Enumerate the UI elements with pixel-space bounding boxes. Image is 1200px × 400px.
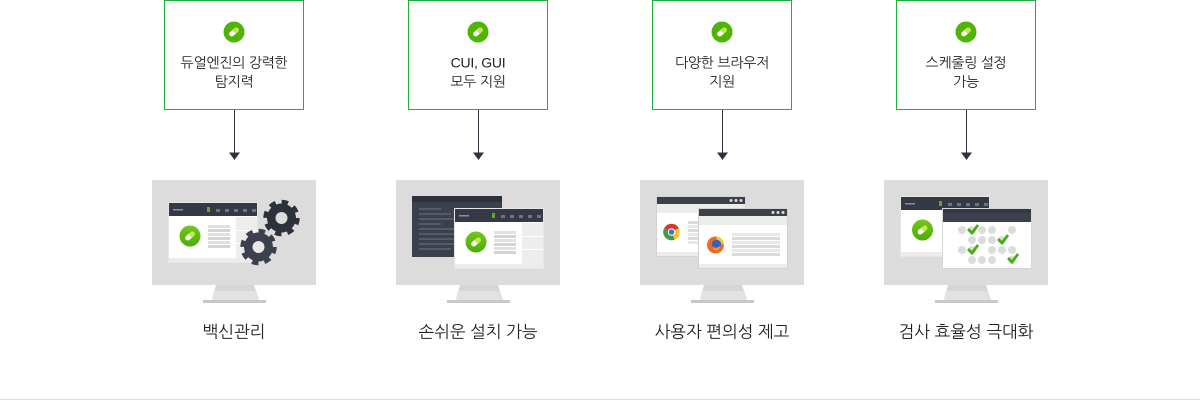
feature box: CUI, GUI 모두 지원: 모두 지원 xyxy=(450,74,506,90)
panel: 손쉬운 설치 가능 xyxy=(396,0,560,342)
icon: gear dark xyxy=(266,202,298,234)
monitor illustration: console and GUI windows xyxy=(396,180,560,303)
feature box: 듀얼엔진의 강력한 탐지력 xyxy=(164,0,304,110)
caption: 검사 효율성 극대화 xyxy=(899,322,1034,342)
arrow xyxy=(229,110,240,160)
feature box: CUI, GUI 모두 지원 xyxy=(408,0,548,110)
monitor illustration: gears xyxy=(152,180,316,303)
icon: chrome xyxy=(663,224,680,240)
caption: 손쉬운 설치 가능 xyxy=(418,322,538,342)
monitor illustration: browsers xyxy=(640,180,804,303)
caption: 사용자 편의성 제고 xyxy=(655,322,790,342)
panel: 사용자 편의성 제고 xyxy=(640,0,804,342)
feature box: 스케줄링 설정 가능: 스케줄링 설정 xyxy=(925,54,1007,70)
arrow xyxy=(961,110,972,160)
caption: 백신관리 xyxy=(203,322,265,342)
monitor illustration: calendar schedule xyxy=(884,180,1048,303)
icon: gear light xyxy=(242,231,274,263)
icons: check marks xyxy=(968,225,1018,262)
panel: 검사 효율성 극대화 xyxy=(884,0,1048,342)
feature box: 스케줄링 설정 가능 xyxy=(896,0,1036,110)
arrow xyxy=(717,110,728,160)
feature box: 다양한 브라우저 지원: 다양한 브라우저 xyxy=(675,54,769,70)
icon: firefox xyxy=(707,236,724,254)
panel: 백신관리 xyxy=(152,0,316,342)
feature box: 다양한 브라우저 지원 xyxy=(652,0,792,110)
feature box: 스케줄링 설정 가능: 가능 xyxy=(953,74,979,90)
arrow xyxy=(473,110,484,160)
feature box: 듀얼엔진의 강력한 탐지력: 탐지력 xyxy=(215,74,253,90)
feature box: CUI, GUI 모두 지원: CUI, GUI xyxy=(451,54,505,70)
feature box: 다양한 브라우저 지원: 지원 xyxy=(709,74,735,90)
feature box: 듀얼엔진의 강력한 탐지력: 듀얼엔진의 강력한 xyxy=(181,54,289,70)
